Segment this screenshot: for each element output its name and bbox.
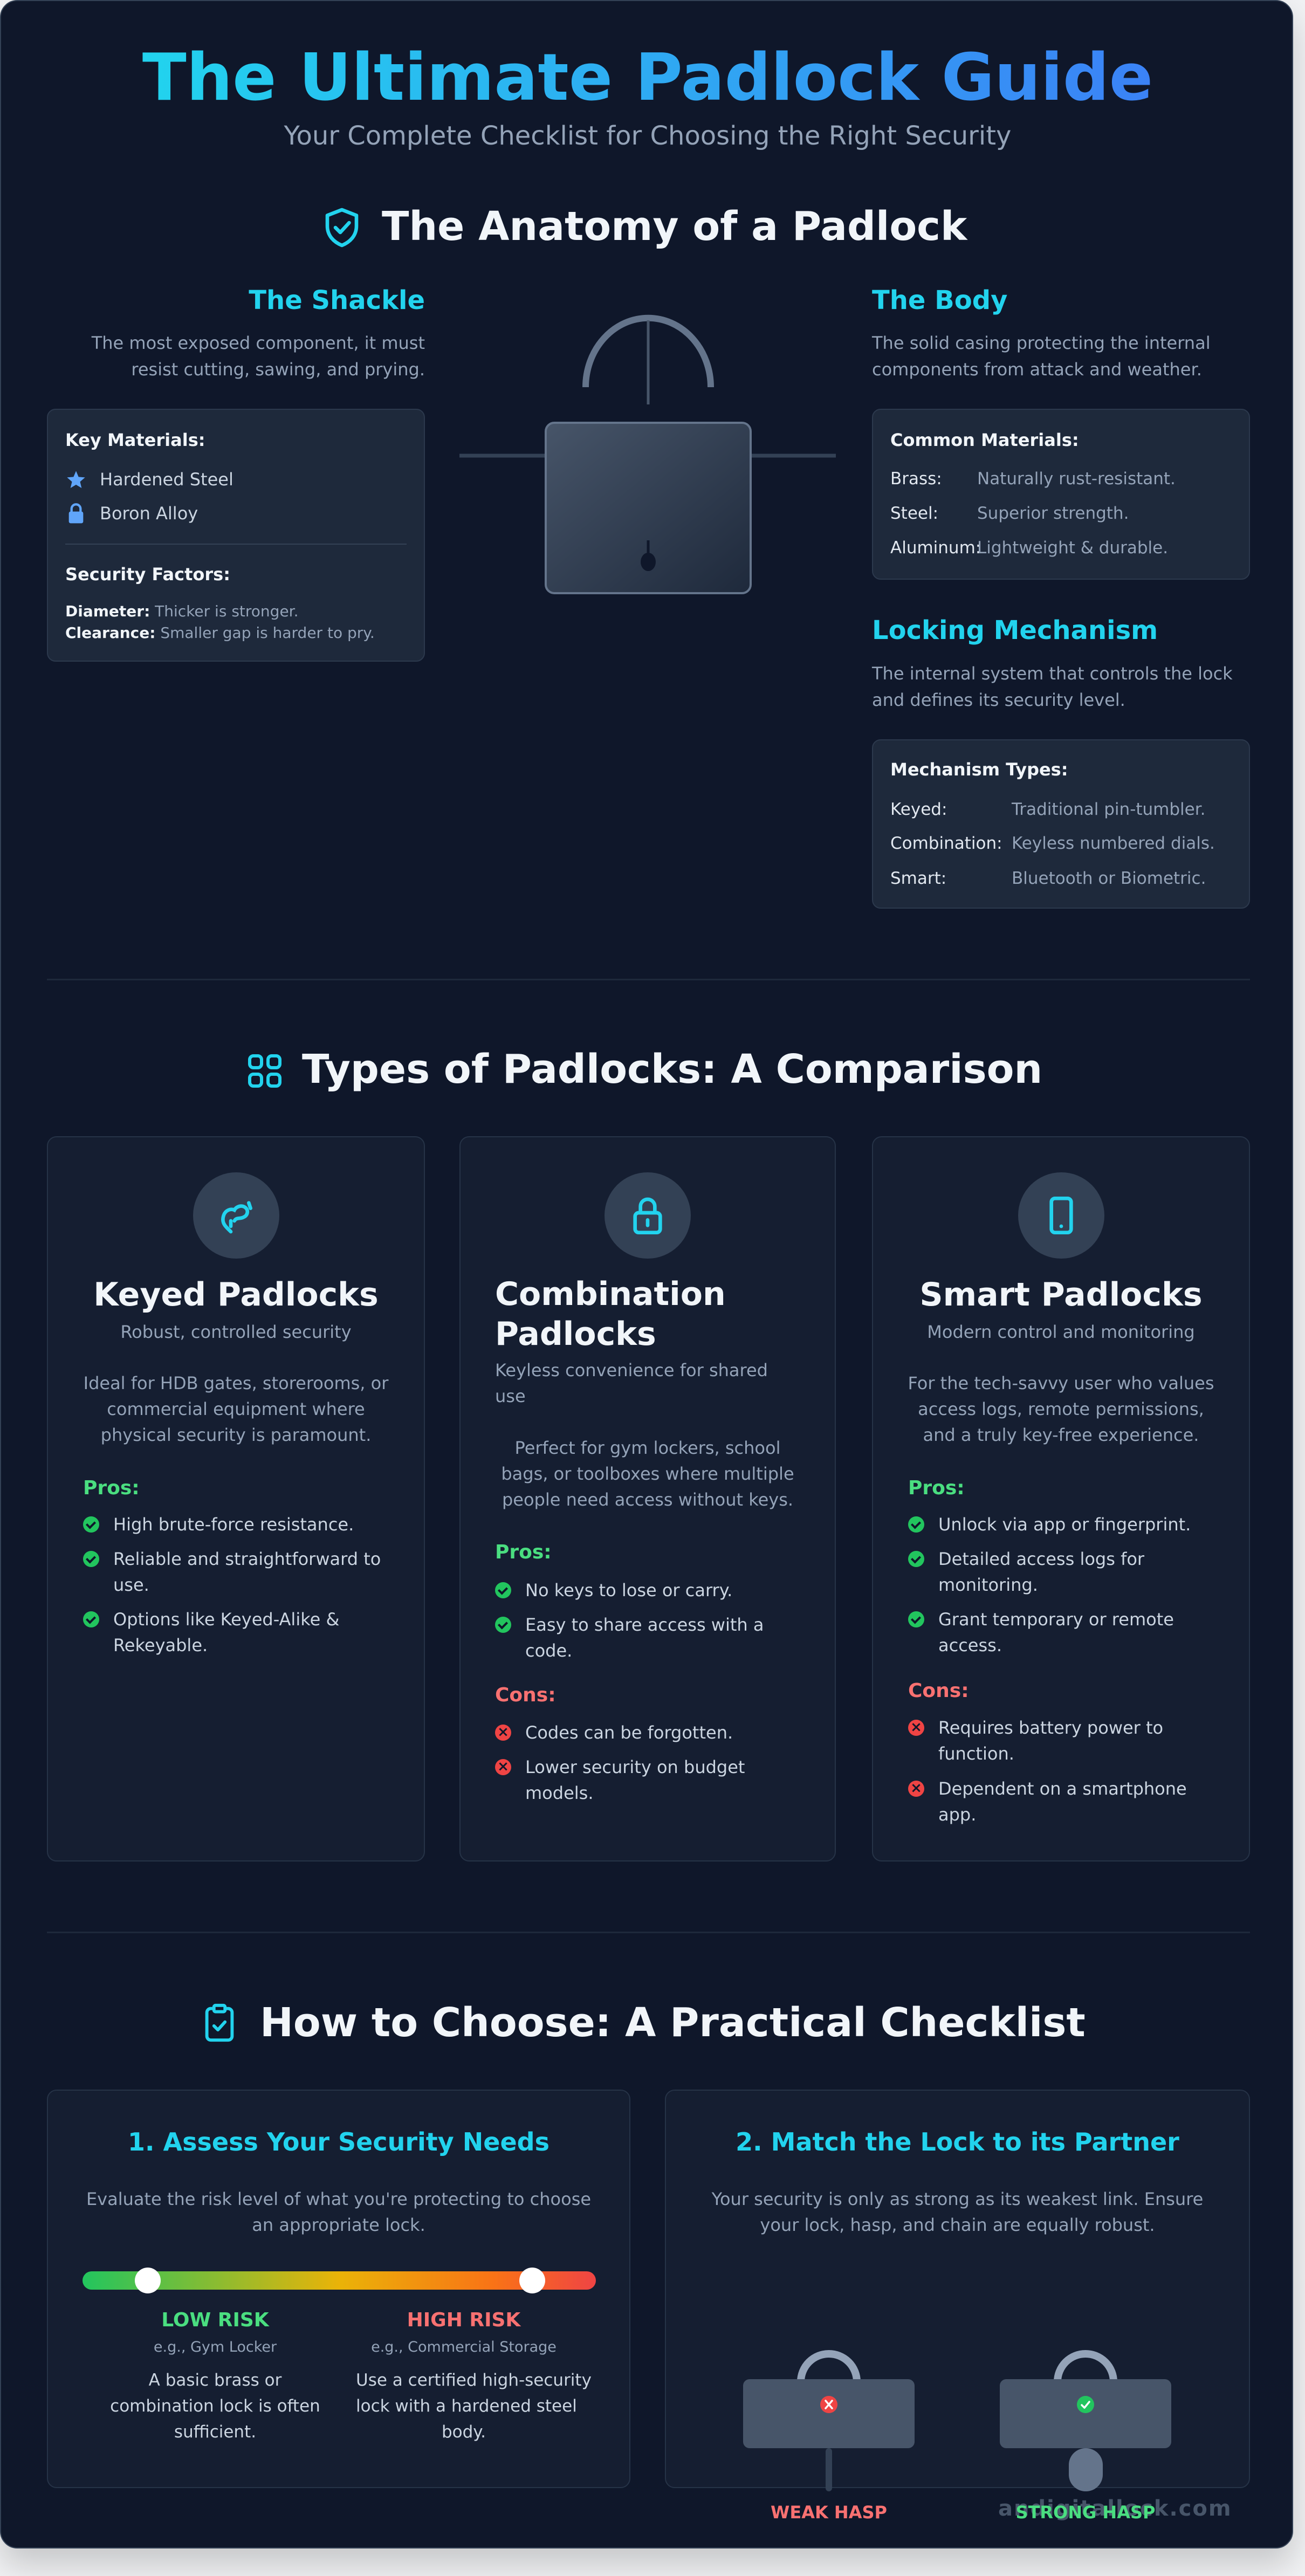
panel: mechanism types: Keyed: [890, 800, 947, 819]
panel: combination padlocks: models. [525, 1783, 593, 1803]
panel: assess security needs: 1. Assess Your Security Needs [128, 2127, 550, 2156]
padlock diagram [459, 315, 836, 594]
panel: body materials: Aluminum: [890, 538, 981, 558]
low risk: sufficient. [174, 2422, 256, 2442]
shackle heading: The Shackle [249, 285, 425, 315]
panel: keyed padlocks: Options like Keyed-Alike & [113, 1609, 339, 1630]
panel: combination padlocks: Padlocks [495, 1315, 656, 1353]
panel: smart padlocks: Modern control and monitoring [927, 1322, 1195, 1342]
panel: smart padlocks: Grant temporary or remote [938, 1609, 1174, 1630]
panel: combination padlocks: code. [525, 1640, 572, 1661]
panel: body materials: Common Materials: [890, 430, 1079, 450]
panel: smart padlocks: Smart Padlocks [919, 1276, 1203, 1314]
panel: keyed padlocks: Reliable and straightforward to [113, 1549, 381, 1569]
label: weak hasp: WEAK HASP [771, 2502, 887, 2523]
panel: combination padlocks: Easy to share access with a [525, 1615, 764, 1635]
panel: combination padlocks: use [495, 1386, 526, 1406]
panel: smart padlocks: Cons: [908, 1680, 969, 1702]
panel: body materials: Naturally rust-resistant. [977, 469, 1176, 489]
icon: clipboard [205, 2004, 234, 2042]
panel: mechanism types: Combination: [890, 834, 1002, 853]
panel: smart padlocks [872, 1136, 1250, 1861]
panel: smart padlocks: access. [938, 1635, 1002, 1655]
panel: match lock to partner [665, 2090, 1250, 2488]
high risk [356, 2309, 592, 2442]
panel: smart padlocks: Requires battery power to [938, 1718, 1163, 1738]
panel: shackle details: Boron Alloy [100, 503, 198, 524]
weak lock [801, 2354, 857, 2382]
heading: types: Types of Padlocks: A Comparison [302, 1046, 1042, 1093]
low risk [110, 2309, 320, 2442]
panel: assess security needs [47, 2090, 630, 2488]
panel: smart padlocks: Detailed access logs for [938, 1549, 1144, 1569]
subtitle: Your Complete Checklist for Choosing the Right Security [284, 121, 1011, 151]
icon: grid [248, 1054, 281, 1088]
panel: body materials: Superior strength. [977, 504, 1129, 523]
panel: combination padlocks: people need access without keys. [502, 1489, 793, 1510]
panel: keyed padlocks: Pros: [83, 1477, 140, 1499]
panel: combination padlocks: Cons: [495, 1684, 556, 1706]
risk gradient bar [83, 2271, 596, 2290]
body heading: The Body [872, 285, 1007, 315]
panel: smart padlocks: and a truly key-free experience. [923, 1425, 1199, 1445]
heading: anatomy: The Anatomy of a Padlock [382, 203, 967, 250]
panel: smart padlocks: function. [938, 1743, 1014, 1764]
panel: smart padlocks: Unlock via app or fingerprint. [938, 1514, 1191, 1535]
panel: keyed padlocks: Robust, controlled security [120, 1322, 352, 1342]
panel: keyed padlocks: High brute-force resistance. [113, 1514, 354, 1535]
panel: mechanism types: Traditional pin-tumbler. [1012, 800, 1206, 819]
panel: assess security needs: an appropriate lock. [252, 2215, 425, 2235]
panel: shackle details [47, 409, 425, 662]
panel: keyed padlocks: Rekeyable. [113, 1635, 208, 1655]
panel: combination padlocks: Perfect for gym lockers, school [515, 1438, 780, 1458]
panel: combination padlocks: Pros: [495, 1541, 552, 1563]
low risk: combination lock is often [110, 2396, 320, 2416]
high risk: lock with a hardened steel [356, 2396, 577, 2416]
high risk: body. [442, 2422, 486, 2442]
panel: assess security needs: Evaluate the risk level of what you're protecting to choose [86, 2189, 591, 2209]
shackle description [92, 333, 425, 380]
low risk: A basic brass or [149, 2371, 281, 2390]
panel: match lock to partner: Your security is only as strong as its weakest link. Ensure [712, 2189, 1203, 2209]
panel: match lock to partner: 2. Match the Lock to its Partner [736, 2127, 1179, 2156]
icon: shield [326, 208, 358, 247]
icon: phone [1018, 1172, 1104, 1259]
panel: keyed padlocks: use. [113, 1575, 149, 1595]
low risk: e.g., Gym Locker [154, 2339, 277, 2355]
shackle description: The most exposed component, it must [92, 333, 425, 353]
panel: shackle details: Hardened Steel [100, 469, 233, 490]
panel: smart padlocks: Pros: [908, 1477, 965, 1499]
icon: star [67, 471, 85, 488]
panel: match lock to partner: your lock, hasp, and chain are equally robust. [760, 2215, 1155, 2235]
high risk: HIGH RISK [407, 2309, 520, 2331]
panel: body materials: Lightweight & durable. [977, 538, 1168, 558]
label: strong hasp: STRONG HASP [1016, 2502, 1155, 2523]
panel: shackle details: Key Materials: [65, 430, 205, 450]
panel: smart padlocks: monitoring. [938, 1575, 1038, 1595]
watermark: andigitallock.com [998, 2496, 1232, 2521]
panel: shackle details: Clearance: Smaller gap is harder to pry. [65, 624, 375, 642]
high risk: Use a certified high-security [356, 2371, 592, 2390]
panel: mechanism types: Keyless numbered dials. [1012, 834, 1215, 853]
panel: combination padlocks: Combination [495, 1275, 726, 1313]
icon: key/fingerprint [193, 1172, 279, 1259]
panel: combination padlocks: bags, or toolboxes where multiple [501, 1464, 794, 1484]
panel: smart padlocks: For the tech-savvy user who values [908, 1373, 1214, 1393]
panel: keyed padlocks: Keyed Padlocks [93, 1276, 379, 1314]
locking mechanism heading: Locking Mechanism [872, 615, 1158, 645]
panel: keyed padlocks: Ideal for HDB gates, storerooms, or [84, 1373, 388, 1393]
locking description: and defines its security level. [872, 690, 1125, 710]
title: The Ultimate Padlock Guide [142, 40, 1153, 115]
low risk: LOW RISK [161, 2309, 269, 2331]
body description: The solid casing protecting the internal [872, 333, 1211, 353]
panel: mechanism types [872, 739, 1250, 909]
strong lock [1057, 2354, 1114, 2382]
panel: combination padlocks: Keyless convenience for shared [495, 1360, 768, 1380]
body description [871, 333, 1211, 380]
high risk: e.g., Commercial Storage [371, 2339, 557, 2355]
panel: shackle details: Diameter: Thicker is stronger. [65, 602, 299, 620]
panel: combination padlocks: Codes can be forgotten. [525, 1722, 733, 1743]
panel: mechanism types: Bluetooth or Biometric. [1012, 869, 1206, 888]
panel: body materials: Brass: [890, 469, 942, 489]
locking description [871, 663, 1233, 710]
icon: lock [69, 503, 83, 523]
shackle description: resist cutting, sawing, and prying. [131, 359, 425, 380]
panel: combination padlocks [459, 1136, 836, 1861]
panel: smart padlocks: access logs, remote permissions, [918, 1399, 1204, 1419]
panel: combination padlocks: Lower security on budget [525, 1757, 745, 1777]
locking description: The internal system that controls the lock [872, 663, 1233, 684]
panel: body materials: Steel: [890, 504, 938, 523]
panel: smart padlocks: Dependent on a smartphone [938, 1778, 1187, 1799]
icon: padlock [605, 1172, 691, 1259]
panel: body materials [872, 409, 1250, 580]
panel: combination padlocks: No keys to lose or carry. [525, 1580, 732, 1600]
heading: checklist: How to Choose: A Practical Checklist [260, 2000, 1086, 2046]
panel: keyed padlocks: physical security is paramount. [101, 1425, 371, 1445]
hasp comparison illustration [743, 2350, 1171, 2491]
panel: shackle details: Security Factors: [65, 564, 230, 585]
panel: keyed padlocks: commercial equipment where [107, 1399, 365, 1419]
panel: mechanism types: Smart: [890, 869, 946, 888]
panel: mechanism types: Mechanism Types: [890, 759, 1068, 780]
body description: components from attack and weather. [872, 359, 1202, 380]
panel: keyed padlocks [47, 1136, 425, 1861]
panel: smart padlocks: app. [938, 1804, 976, 1825]
